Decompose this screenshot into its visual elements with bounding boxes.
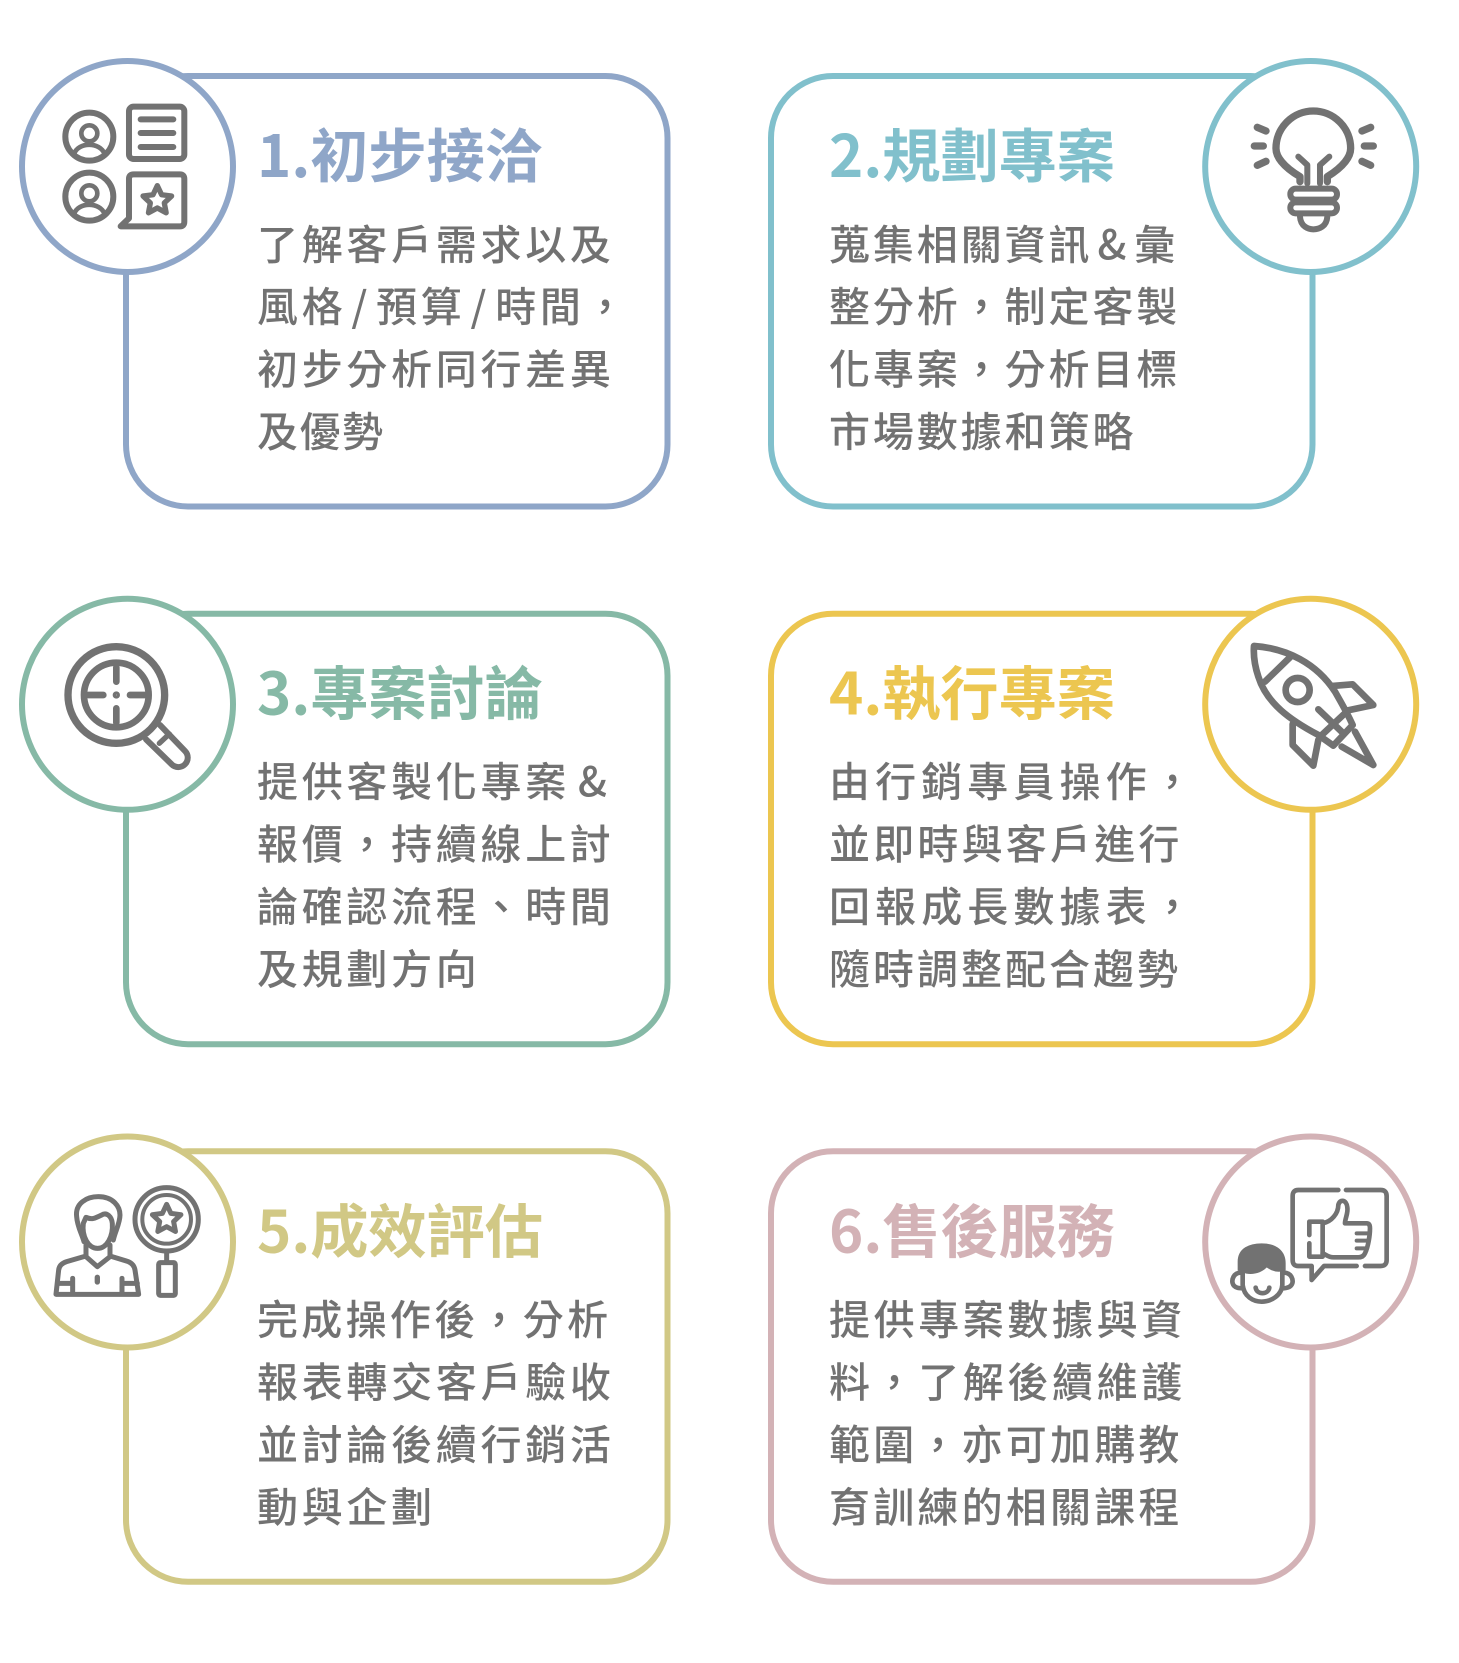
circle 6: [1205, 1136, 1416, 1348]
body text 4: 由行銷專員操作，: [829, 749, 1198, 809]
icon: people, document and star: [65, 107, 184, 226]
heading 5: 5.成效評估: [257, 1184, 543, 1269]
panel: step 2: [771, 61, 1416, 506]
body text 4: 隨時調整配合趨勢: [829, 936, 1181, 996]
circle 1: [22, 61, 233, 272]
body text 5: 並討論後續行銷活: [257, 1411, 615, 1471]
body text 4: 回報成長數據表，: [829, 874, 1198, 934]
panel: step 6: [771, 1136, 1416, 1582]
panel: step 5: [22, 1136, 668, 1582]
circle 5: [22, 1136, 233, 1348]
body text 6: 範圍，亦可加購教: [829, 1411, 1183, 1471]
body text 6: 提供專案數據與資: [829, 1286, 1186, 1346]
heading 3: 3.專案討論: [257, 647, 543, 732]
card outline 6: [771, 1151, 1312, 1582]
body text 5: 報表轉交客戶驗收: [257, 1349, 615, 1409]
heading 6: 6.售後服務: [829, 1184, 1115, 1269]
body text 3: 論確認流程、時間: [257, 874, 615, 934]
body text 3: [257, 749, 615, 996]
body text 3: 提供客製化專案&: [257, 749, 611, 809]
card outline 4: [771, 614, 1312, 1044]
body text 1: 及優勢: [257, 398, 384, 458]
panel: step 4: [771, 599, 1416, 1044]
body text 5: 動與企劃: [257, 1474, 436, 1534]
body text 2: 整分析，制定客製: [829, 274, 1180, 334]
circle 3: [22, 599, 233, 810]
body text 2: 蒐集相關資訊&彙: [829, 212, 1178, 272]
body text 6: 料，了解後續維護: [829, 1349, 1186, 1409]
body text 1: 初步分析同行差異: [257, 336, 615, 396]
body text 6: 育訓練的相關課程: [829, 1474, 1183, 1534]
heading 1: 1.初步接洽: [257, 109, 543, 194]
body text 3: 報價，持續線上討: [257, 811, 615, 871]
circle 4: [1205, 599, 1416, 810]
circle 2: [1205, 61, 1416, 272]
icon: magnifier with crosshair: [68, 647, 188, 767]
body text 2: 化專案，分析目標: [829, 336, 1180, 396]
icon: rocket: [1254, 646, 1373, 766]
body text 5: [257, 1286, 615, 1534]
body text 3: 及規劃方向: [257, 936, 480, 996]
panel: step 3: [22, 599, 668, 1044]
icon: person with thumbs-up speech bubble: [1232, 1190, 1387, 1302]
body text 4: [829, 749, 1198, 996]
body text 5: 完成操作後，分析: [257, 1286, 611, 1346]
heading 4: 4.執行專案: [829, 647, 1115, 732]
body text 4: 並即時與客戶進行: [829, 811, 1183, 871]
body text 1: 風格/預算/時間，: [257, 274, 629, 334]
card outline 5: [126, 1151, 668, 1582]
card outline 3: [126, 614, 668, 1044]
body text 2: [829, 212, 1180, 458]
panel: step 1: [22, 61, 668, 506]
body text 1: 了解客戶需求以及: [257, 212, 615, 272]
icon: person and magnifier with star: [56, 1188, 198, 1295]
heading 2: 2.規劃專案: [829, 109, 1115, 194]
card outline 1: [126, 76, 668, 506]
body text 2: 市場數據和策略: [829, 398, 1136, 458]
body text 6: [829, 1286, 1186, 1534]
card outline 2: [771, 76, 1312, 506]
body text 1: [257, 212, 629, 458]
icon: light bulb: [1254, 111, 1373, 229]
